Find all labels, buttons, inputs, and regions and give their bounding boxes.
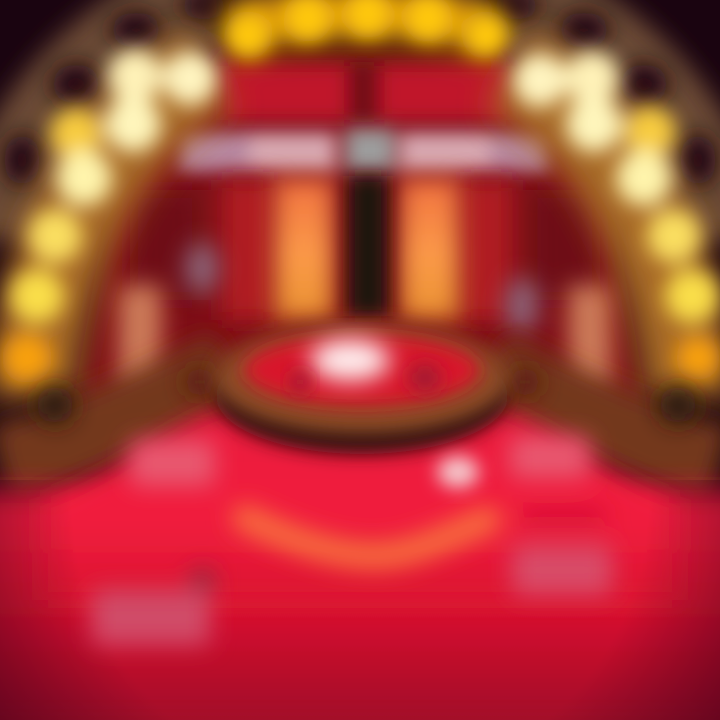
blurred floor labels <box>92 436 612 645</box>
arch glow band <box>30 13 690 400</box>
curtain: top red valance <box>222 62 512 122</box>
curtain: lower side glow <box>118 242 612 393</box>
floor <box>0 405 720 720</box>
table shadow rim <box>216 338 508 454</box>
top yellow bulbs <box>224 0 510 59</box>
central round table <box>214 322 510 454</box>
label: central gold title <box>245 518 488 556</box>
right bulbs <box>513 51 720 380</box>
label: upper left <box>130 440 215 486</box>
left bulbs <box>2 49 217 383</box>
arch lattice <box>0 0 720 240</box>
curtains <box>118 62 612 393</box>
label: upper right <box>510 436 590 478</box>
lattice dark holes <box>4 0 716 186</box>
curtain: orange glowing columns <box>274 178 460 320</box>
curtain: white band <box>178 128 550 172</box>
floor upper band <box>0 490 720 720</box>
table rim <box>214 322 510 434</box>
floor base <box>0 535 720 720</box>
floor rails <box>0 370 720 465</box>
curtain backdrop <box>70 50 650 420</box>
label: right block <box>512 545 612 595</box>
rail dark bulbs <box>36 367 697 424</box>
label: small white patch <box>437 456 479 488</box>
table white emblem <box>310 339 390 381</box>
curtain: side red drapes <box>130 180 600 320</box>
label: dark spot <box>191 568 215 592</box>
table dark marks <box>409 364 441 392</box>
label: right dark strip <box>520 510 605 524</box>
floor centre wedge <box>40 405 680 600</box>
label: lower left block <box>92 590 210 645</box>
table top <box>244 334 480 406</box>
curtain: central dark column <box>349 176 387 316</box>
floor vignette <box>0 480 720 720</box>
arch bulbs <box>2 0 720 383</box>
